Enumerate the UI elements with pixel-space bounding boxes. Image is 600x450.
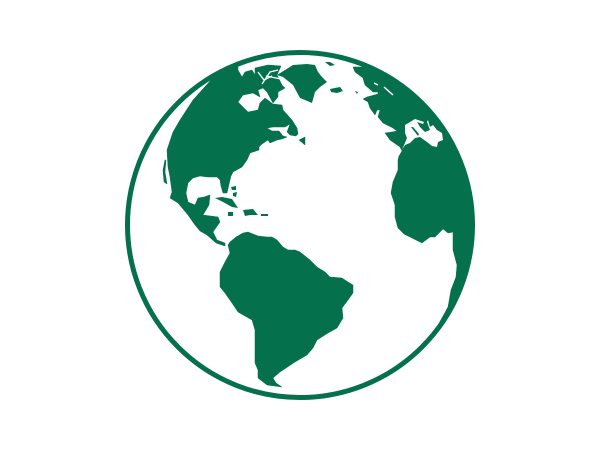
islands: Caribbean (215, 186, 268, 216)
continent: South America (220, 232, 353, 387)
Newfoundland (299, 137, 305, 145)
Arctic sea inlets (374, 83, 393, 95)
globe outline ring (128, 52, 472, 398)
islands: Iceland, Svalbard, UK (325, 62, 358, 94)
island: Greenland (277, 64, 327, 103)
continents: Europe, Africa and Asia (353, 64, 472, 340)
continent: North and Central America (163, 63, 305, 246)
Baja California (163, 160, 167, 184)
arctic channels (258, 70, 281, 84)
Mediterranean and Black Sea (402, 119, 443, 150)
Italy (411, 127, 419, 136)
